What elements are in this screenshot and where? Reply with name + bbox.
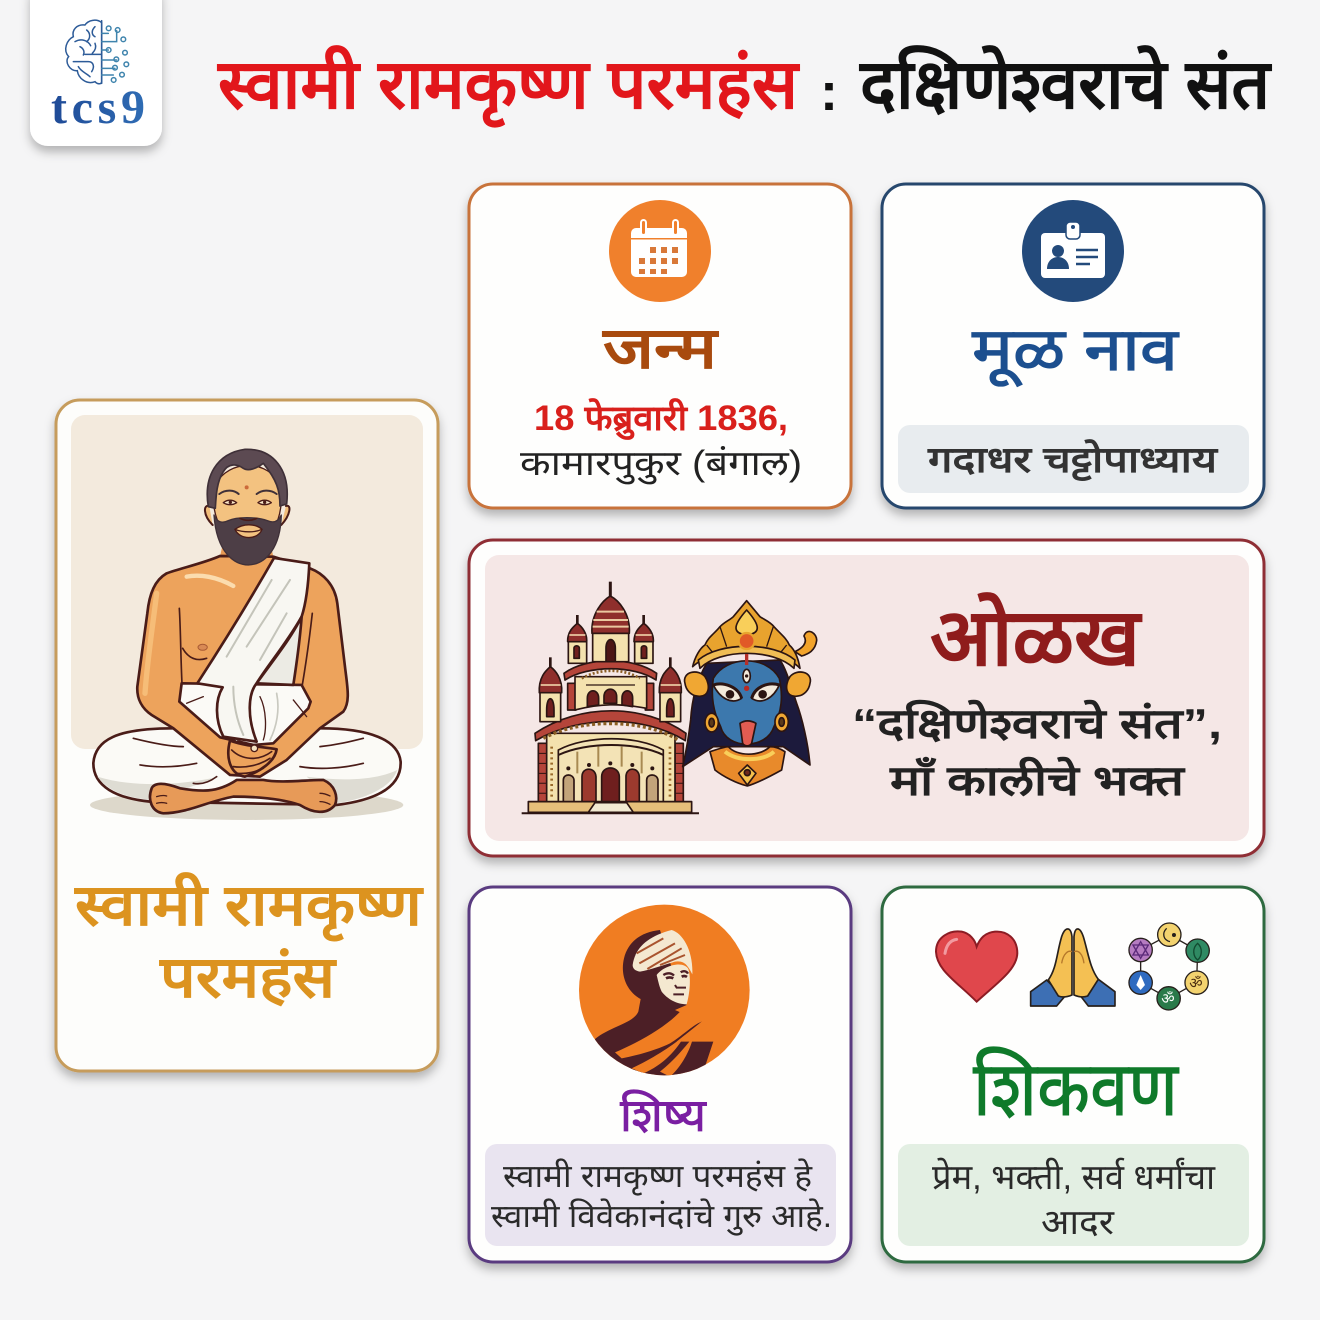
illustration: seated Ramakrishna xyxy=(90,449,403,820)
portrait name: परमहंस xyxy=(159,945,337,1010)
disciple text box: स्वामी विवेकानंदांचे गुरु आहे. xyxy=(491,1198,832,1236)
name box xyxy=(898,425,1249,493)
icon: heart xyxy=(936,931,1017,1002)
panel: identity xyxy=(469,540,1264,856)
teachings text box: प्रेम, भक्ती, सर्व धर्मांचा xyxy=(932,1157,1216,1197)
title: : xyxy=(820,62,838,122)
icon: calendar xyxy=(609,200,711,302)
teachings text box: आदर xyxy=(1041,1203,1115,1242)
panel: original name xyxy=(882,184,1264,508)
illustration: Goddess Kali xyxy=(683,601,817,786)
logo wordmark: tcs9 xyxy=(51,81,145,134)
illustration: Swami Vivekananda xyxy=(579,905,750,1082)
portrait name xyxy=(74,872,424,1010)
identity text xyxy=(852,699,1222,804)
heading: disciple: शिष्य xyxy=(620,1089,707,1141)
panel: teachings xyxy=(882,887,1264,1262)
icon: religious symbols ring: ॐ xyxy=(1189,975,1203,992)
icon: religious symbols ring xyxy=(1129,923,1209,1010)
birth place: कामारपुकुर (बंगाल) xyxy=(520,444,802,485)
title: स्वामी रामकृष्ण परमहंस xyxy=(216,45,800,128)
heading: identity: ओळख xyxy=(930,592,1143,682)
icon: brain circuit xyxy=(66,20,129,84)
disciple text box xyxy=(485,1144,836,1246)
icon: praying hands xyxy=(1031,929,1115,1006)
heading: birth: जन्म xyxy=(602,316,720,381)
panel: birth xyxy=(469,184,851,508)
identity text: माँ कालीचे भक्त xyxy=(889,756,1186,804)
panel: portrait xyxy=(56,400,438,1071)
title xyxy=(216,45,1273,128)
icon: id badge xyxy=(1022,200,1124,302)
portrait name: स्वामी रामकृष्ण xyxy=(74,872,424,942)
birth date: 18 फेब्रुवारी 1836, xyxy=(534,398,788,440)
name box: गदाधर चट्टोपाध्याय xyxy=(927,439,1218,481)
illustration: Dakshineswar temple xyxy=(522,582,699,813)
heading: teachings: शिकवण xyxy=(973,1046,1180,1132)
teachings text box xyxy=(898,1144,1249,1246)
disciple text box: स्वामी रामकृष्ण परमहंस हे xyxy=(503,1158,813,1196)
identity text: “दक्षिणेश्वराचे संत”, xyxy=(852,699,1222,747)
logo card xyxy=(30,0,162,146)
panel: disciple xyxy=(469,887,851,1262)
icon: religious symbols ring: ॐ xyxy=(1161,991,1175,1008)
title: दक्षिणेश्वराचे संत xyxy=(858,45,1273,123)
heading: original name: मूळ नाव xyxy=(972,316,1180,387)
